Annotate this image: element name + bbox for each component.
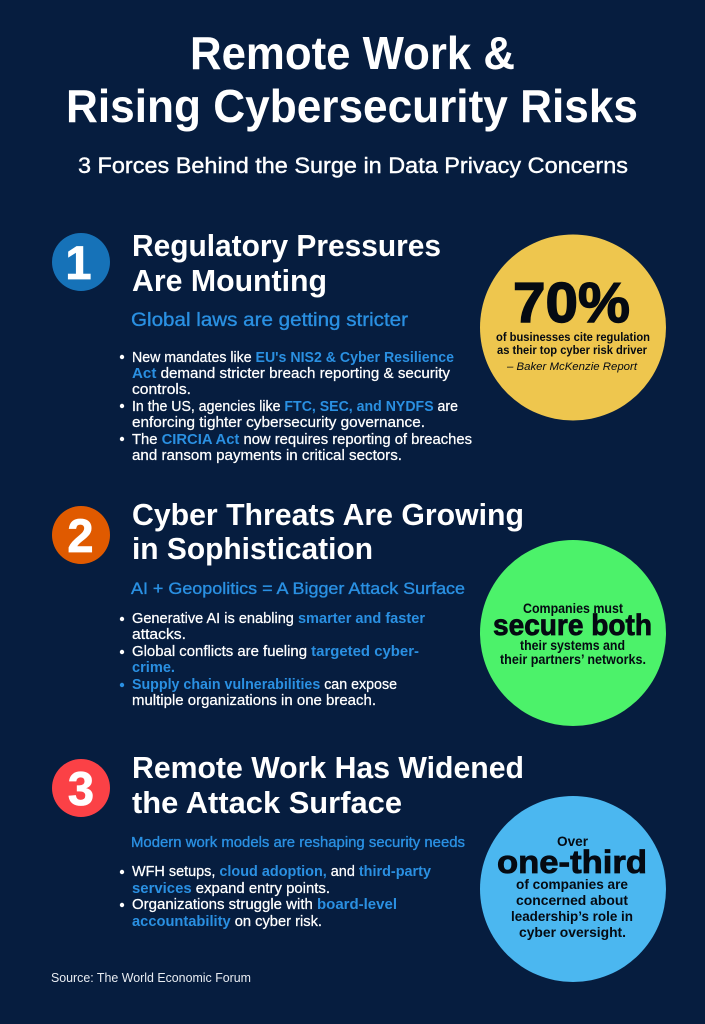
bullet list: threat points: crime. xyxy=(132,660,175,676)
callout: secure both circle: secure both xyxy=(493,609,652,642)
source note: Source: The World Economic Forum xyxy=(51,970,251,985)
callout: one-third circle: one-third xyxy=(497,844,647,880)
panel: section 1 regulatory pressures xyxy=(52,228,666,464)
bullet list: regulatory points: New mandates like EU's NIS2 & Cyber Resilience xyxy=(132,350,454,366)
heading: regulatory pressures xyxy=(132,228,441,298)
bullet list: regulatory points: The CIRCIA Act now requires reporting of breaches xyxy=(132,432,472,448)
bullet list: remote work points: Organizations struggle with board-level xyxy=(132,897,397,913)
icon: number 3 badge: 3 xyxy=(68,762,94,815)
subheading: global laws: Global laws are getting stricter xyxy=(131,309,409,331)
callout: one-third circle: of companies are xyxy=(516,876,628,892)
heading: regulatory pressures: Are Mounting xyxy=(132,263,327,298)
bullet list: remote work points: accountability on cyber risk. xyxy=(132,914,322,930)
bullet list: threat points xyxy=(120,611,425,709)
bullet list: regulatory points: Act demand stricter breach reporting & security xyxy=(132,366,451,382)
bullet list: remote work points: WFH setups, cloud adoption, and third-party xyxy=(132,864,431,880)
heading: cyber threats: in Sophistication xyxy=(132,531,373,566)
callout: one-third circle xyxy=(480,796,666,982)
title: Rising Cybersecurity Risks xyxy=(66,80,638,132)
icon: number 3 badge xyxy=(52,759,110,817)
bullet list: regulatory points: controls. xyxy=(132,382,191,398)
bullet list: remote work points: services expand entry points. xyxy=(132,881,330,897)
callout: one-third circle: Over xyxy=(557,833,589,849)
heading: cyber threats: Cyber Threats Are Growing xyxy=(132,497,524,532)
heading: remote work: the Attack Surface xyxy=(132,785,402,820)
bullet list: threat points: multiple organizations in one breach. xyxy=(132,693,376,709)
bullet list: threat points: Supply chain vulnerabilities can expose xyxy=(132,677,397,693)
callout: 70% stat circle: of businesses cite regulation xyxy=(496,332,650,344)
icon: number 2 badge xyxy=(52,506,110,564)
bullet list: threat points: attacks. xyxy=(132,627,186,643)
icon: number 2 badge: 2 xyxy=(67,509,94,562)
panel: section 3 remote work xyxy=(52,750,666,982)
callout: secure both circle xyxy=(480,540,666,726)
subheading: AI and geopolitics: AI + Geopolitics = A Bigger Attack Surface xyxy=(131,579,465,598)
bullet list: threat points: Generative AI is enabling smarter and faster xyxy=(132,611,425,627)
heading: remote work xyxy=(132,750,524,820)
title xyxy=(66,27,638,132)
callout: one-third circle: concerned about xyxy=(516,892,628,908)
callout: 70% stat circle: 70% xyxy=(513,271,630,335)
callout: secure both circle: their partners’ networks. xyxy=(500,652,646,667)
bullet list: regulatory points: enforcing tighter cybersecurity governance. xyxy=(132,415,425,431)
bullet list: remote work points xyxy=(120,864,431,930)
callout: 70% stat circle xyxy=(480,234,666,420)
subheading: modern work models: Modern work models are reshaping security needs xyxy=(131,834,465,851)
callout: one-third circle: leadership’s role in xyxy=(511,908,633,924)
icon: number 1 badge xyxy=(52,233,110,291)
bullet list: regulatory points: and ransom payments in critical sectors. xyxy=(132,448,402,464)
panel: section 2 cyber threats xyxy=(52,497,666,726)
subtitle: 3 Forces Behind the Surge in Data Privacy Concerns xyxy=(78,153,628,178)
icon: number 1 badge: 1 xyxy=(65,236,92,289)
callout: 70% stat circle: – Baker McKenzie Report xyxy=(506,361,638,373)
heading: regulatory pressures: Regulatory Pressures xyxy=(132,228,441,263)
callout: 70% stat circle: as their top cyber risk driver xyxy=(497,345,647,357)
title: Remote Work & xyxy=(190,27,515,79)
bullet list: regulatory points xyxy=(120,350,472,464)
callout: secure both circle: Companies must xyxy=(523,601,623,616)
callout: secure both circle: their systems and xyxy=(520,638,625,653)
callout: one-third circle: cyber oversight. xyxy=(519,924,626,940)
heading: remote work: Remote Work Has Widened xyxy=(132,750,524,785)
bullet list: threat points: Global conflicts are fueling targeted cyber- xyxy=(132,644,419,660)
heading: cyber threats xyxy=(132,497,524,566)
bullet list: regulatory points: In the US, agencies like FTC, SEC, and NYDFS are xyxy=(132,399,458,415)
